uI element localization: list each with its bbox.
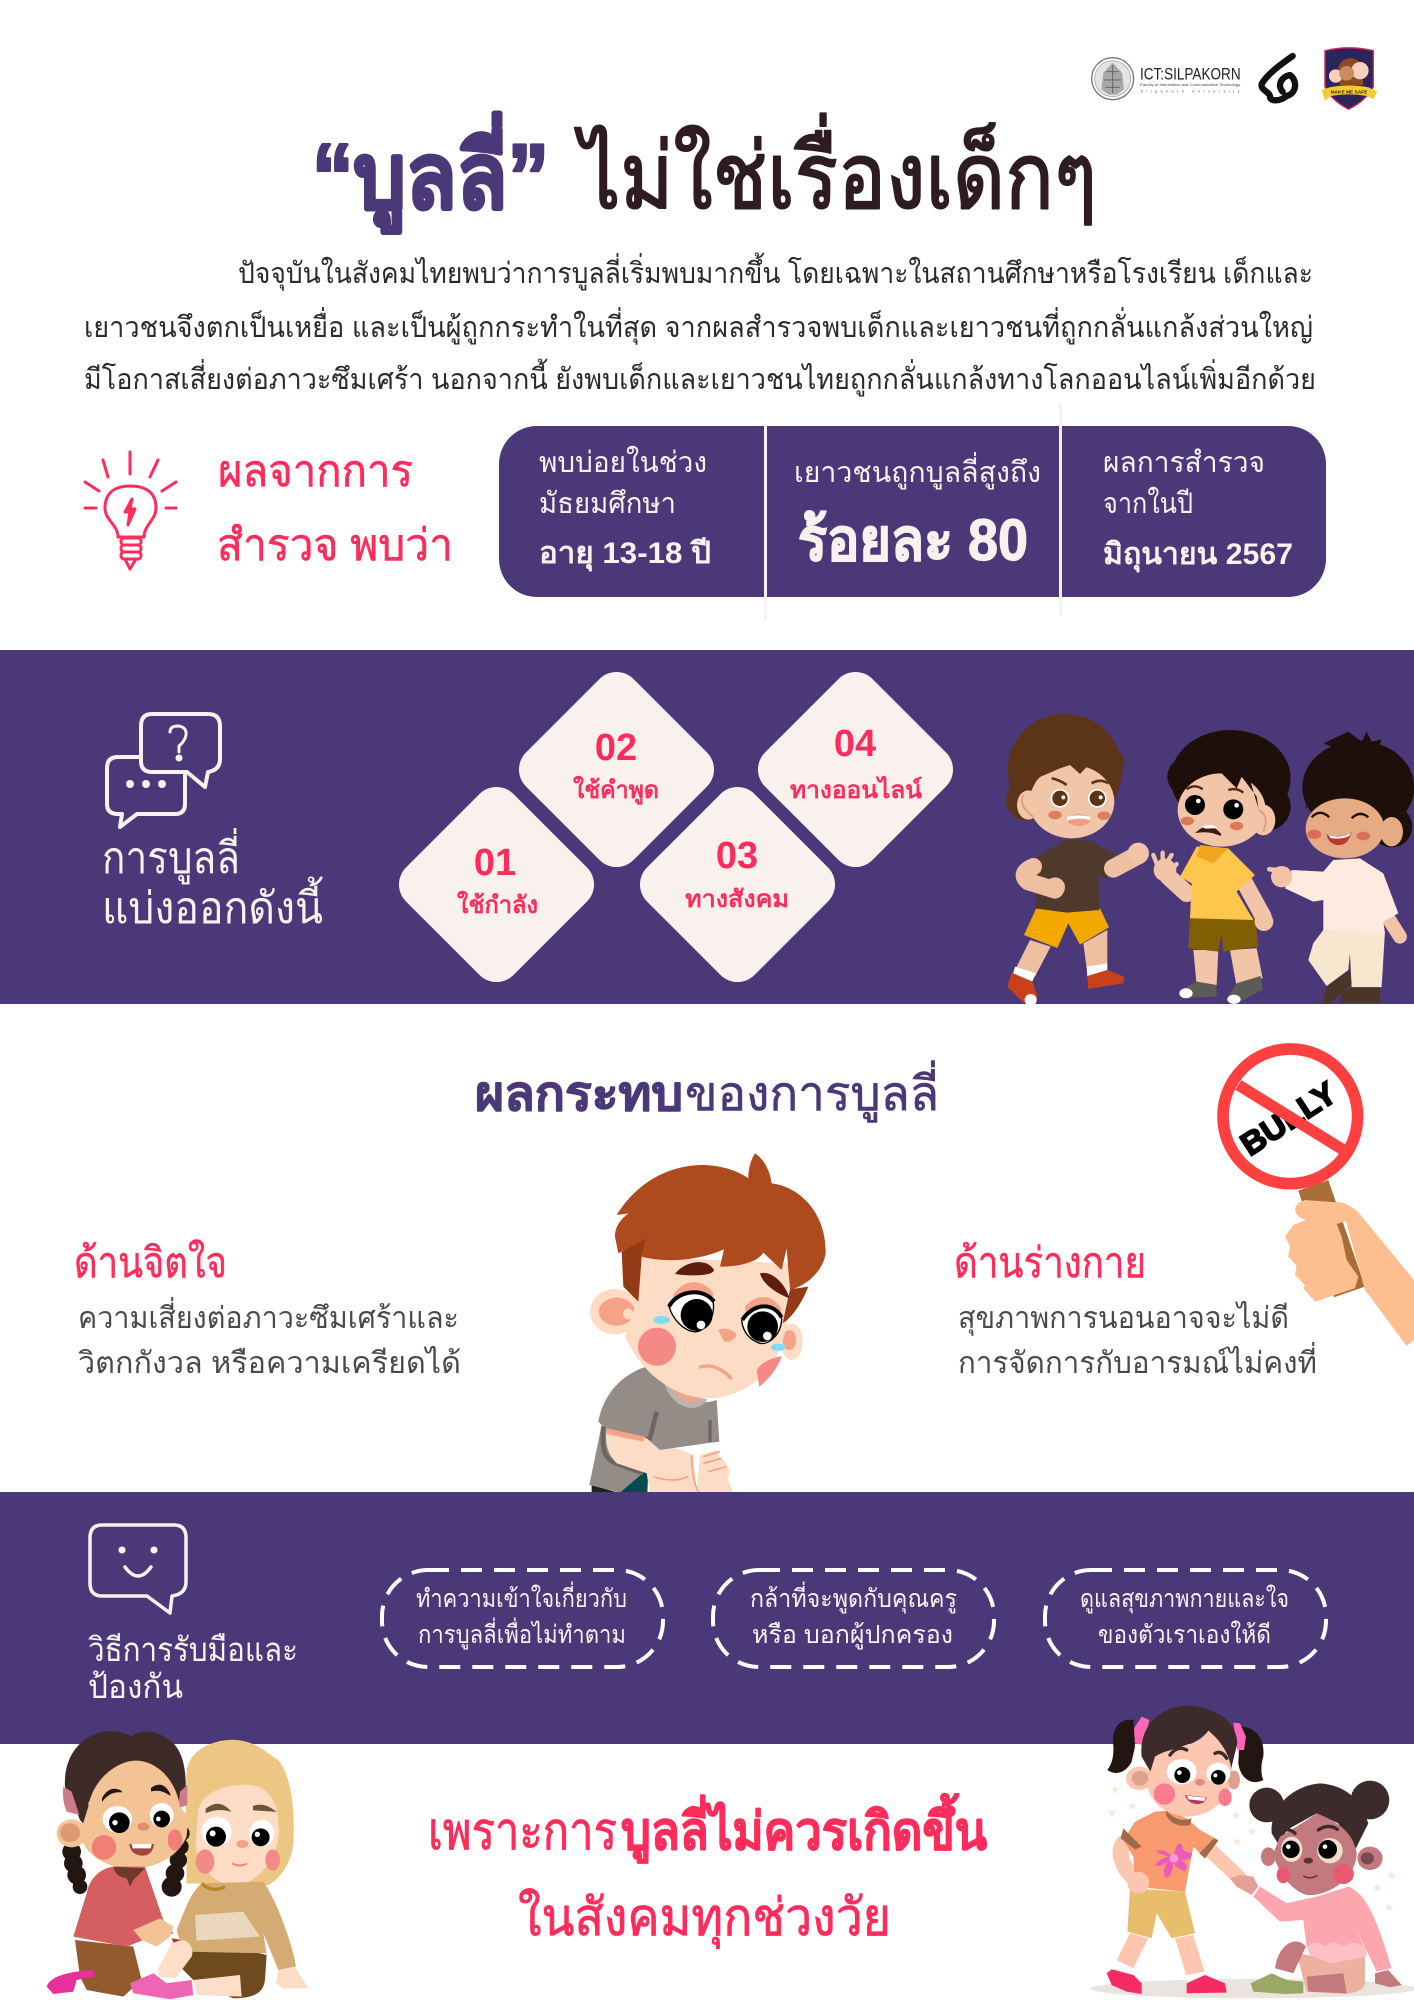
intro paragraph: เยาวชนจึงตกเป็นเหยื่อ และเป็นผู้ถูกกระทำในที่สุด จากผลสำรวจพบเด็กและเยาวชนที่ถูกกลั่นแกล้งส่วนใหญ่: [84, 307, 1313, 345]
heading: coping and prevention: [88, 1631, 298, 1705]
decoration: sparkles: [1108, 1785, 1396, 1911]
icon: speech bubbles: [107, 714, 220, 827]
stat: survey date: จากในปี: [1103, 486, 1193, 520]
title: ไม่ใช่เรื่องเด็กๆ: [574, 113, 1097, 228]
boy: laughing onlooker: [1269, 732, 1414, 1004]
panel: coping band: [0, 1492, 1414, 1744]
logo: Make Me Safe shield: MAKE ME SAFE: [1331, 89, 1368, 95]
heading: bullying types: แบ่งออกดังนี้: [102, 876, 323, 933]
stat: age range: [539, 445, 711, 572]
text block: mental impact: ด้านจิตใจ: [74, 1239, 227, 1286]
diamond 01: [389, 777, 604, 992]
title: “บูลลี่”: [312, 111, 549, 234]
diamond 01: 01: [474, 842, 516, 884]
coping tip 3: [1045, 1570, 1326, 1667]
stat: age range: มัธยมศึกษา: [539, 488, 676, 520]
diamond 04: 04: [834, 723, 876, 765]
text block: physical impact: การจัดการกับอารมณ์ไม่คงที่: [958, 1342, 1317, 1380]
coping tip 1: [382, 1570, 663, 1667]
coping tip 1: ทำความเข้าใจเกี่ยวกับ: [416, 1581, 627, 1613]
stat: survey date: มิถุนายน 2567: [1103, 538, 1293, 573]
survey results heading: ผลจากการ: [218, 447, 413, 496]
illustration: girl helping friend up: [1090, 1706, 1414, 1998]
closing statement: ในสังคมทุกช่วงวัย: [518, 1888, 891, 1949]
illustration: hand holding no-bully sign: BULLY: [1234, 1074, 1343, 1163]
diamond 02: ใช้คำพูด: [573, 775, 659, 805]
logos: ICT Silpakorn, squiggle, Make Me Safe badge: [1092, 48, 1377, 109]
icon: light bulb: [85, 452, 176, 569]
girl: braided helper: [47, 1731, 193, 1999]
title: [312, 111, 1097, 234]
text block: physical impact: ด้านร่างกาย: [954, 1239, 1146, 1286]
heading: bullying types: การบูลลี่: [102, 827, 240, 885]
text block: mental impact: ความเสี่ยงต่อภาวะซึมเศร้าและ: [78, 1297, 459, 1335]
icon: smiling speech bubble: [90, 1525, 186, 1613]
logo: black squiggle: [1262, 56, 1295, 100]
diamond 02: 02: [595, 727, 637, 769]
diamond 03: ทางสังคม: [685, 886, 789, 913]
diamond 03: 03: [716, 835, 758, 877]
survey results heading: สำรวจ พบว่า: [217, 521, 453, 570]
coping tip 2: [713, 1570, 994, 1667]
coping tip 3: ดูแลสุขภาพกายและใจ: [1080, 1584, 1289, 1614]
diamond 03: [630, 777, 845, 992]
illustration: crying boy: [589, 1153, 826, 1493]
text block: physical impact: [954, 1239, 1317, 1380]
text block: physical impact: สุขภาพการนอนอาจจะไม่ดี: [958, 1300, 1289, 1337]
closing statement: [428, 1793, 987, 1949]
survey results heading: [217, 447, 453, 570]
heading: impact of bullying: ผลกระทบ: [475, 1068, 683, 1121]
diamond 02: [509, 662, 724, 877]
intro paragraph: มีโอกาสเสี่ยงต่อภาวะซึมเศร้า นอกจากนี้ ยังพบเด็กและเยาวชนไทยถูกกลั่นแกล้งทางโลกออนไลน์เพิ่มอีกด้วย: [84, 358, 1316, 397]
coping tip 2: กล้าที่จะพูดกับคุณครู: [750, 1581, 957, 1614]
logo: ICT Silpakorn wordmark: Faculty of Information and Communication Technology: [1140, 82, 1240, 87]
illustration: girl tending friend's knee: [47, 1731, 308, 1999]
coping tip 1: การบูลลี่เพื่อไม่ทำตาม: [418, 1617, 626, 1650]
diamond 01: ใช้กำลัง: [457, 890, 538, 919]
stat: survey date: ผลการสำรวจ: [1103, 447, 1265, 479]
panel: bullying types band: [0, 650, 1414, 1004]
coping tip 2: หรือ บอกผู้ปกครอง: [752, 1621, 953, 1650]
diamond 04: [748, 662, 963, 877]
heading: impact of bullying: ของการบูลลี่: [685, 1060, 939, 1123]
logo: university seal: [1092, 58, 1134, 100]
stat: age range: พบบ่อยในช่วง: [539, 445, 707, 479]
logo: ICT Silpakorn wordmark: [1140, 64, 1241, 94]
girl: standing with pigtails: [1107, 1706, 1264, 1994]
stat: survey date: [1103, 447, 1293, 573]
girl: blonde friend: [158, 1740, 308, 1998]
boy: angry bully: [1006, 714, 1149, 1006]
stat: 80 percent: [794, 452, 1041, 573]
coping tip 3: ของตัวเราเองให้ดี: [1098, 1620, 1271, 1649]
intro paragraph: [84, 252, 1316, 397]
illustration: hand holding no-bully sign: [1223, 1049, 1414, 1346]
stat: 80 percent: เยาวชนถูกบูลลี่สูงถึง: [794, 452, 1041, 490]
panel: survey statistics: [499, 404, 1326, 620]
heading: bullying types: [102, 827, 323, 933]
boy: frightened victim: [1153, 730, 1291, 1004]
text block: mental impact: วิตกกังวล หรือความเครียดได้: [78, 1345, 461, 1380]
stat: age range: อายุ 13-18 ปี: [539, 537, 711, 572]
heading: impact of bullying: [475, 1060, 939, 1123]
intro paragraph: ปัจจุบันในสังคมไทยพบว่าการบูลลี่เริ่มพบมากขึ้น โดยเฉพาะในสถานศึกษาหรือโรงเรียน เด็กและ: [238, 252, 1313, 291]
illustration: three boys: [1006, 714, 1414, 1006]
stat: 80 percent: ร้อยละ 80: [798, 508, 1028, 573]
logo: ICT Silpakorn wordmark: ICT:SILPAKORN: [1140, 64, 1241, 83]
text block: mental impact: [74, 1239, 461, 1380]
closing statement: บูลลี่ไม่ควรเกิดขึ้น: [621, 1793, 987, 1864]
closing statement: เพราะการ: [428, 1803, 617, 1861]
heading: coping and prevention: ป้องกัน: [88, 1668, 183, 1705]
diamond 04: ทางออนไลน์: [790, 775, 923, 804]
logo: Make Me Safe shield: [1322, 48, 1377, 109]
logo: ICT Silpakorn wordmark: Silpakorn University: [1140, 89, 1240, 94]
heading: coping and prevention: วิธีการรับมือและ: [88, 1631, 298, 1668]
girl: seated with hair buns: [1230, 1781, 1402, 1994]
